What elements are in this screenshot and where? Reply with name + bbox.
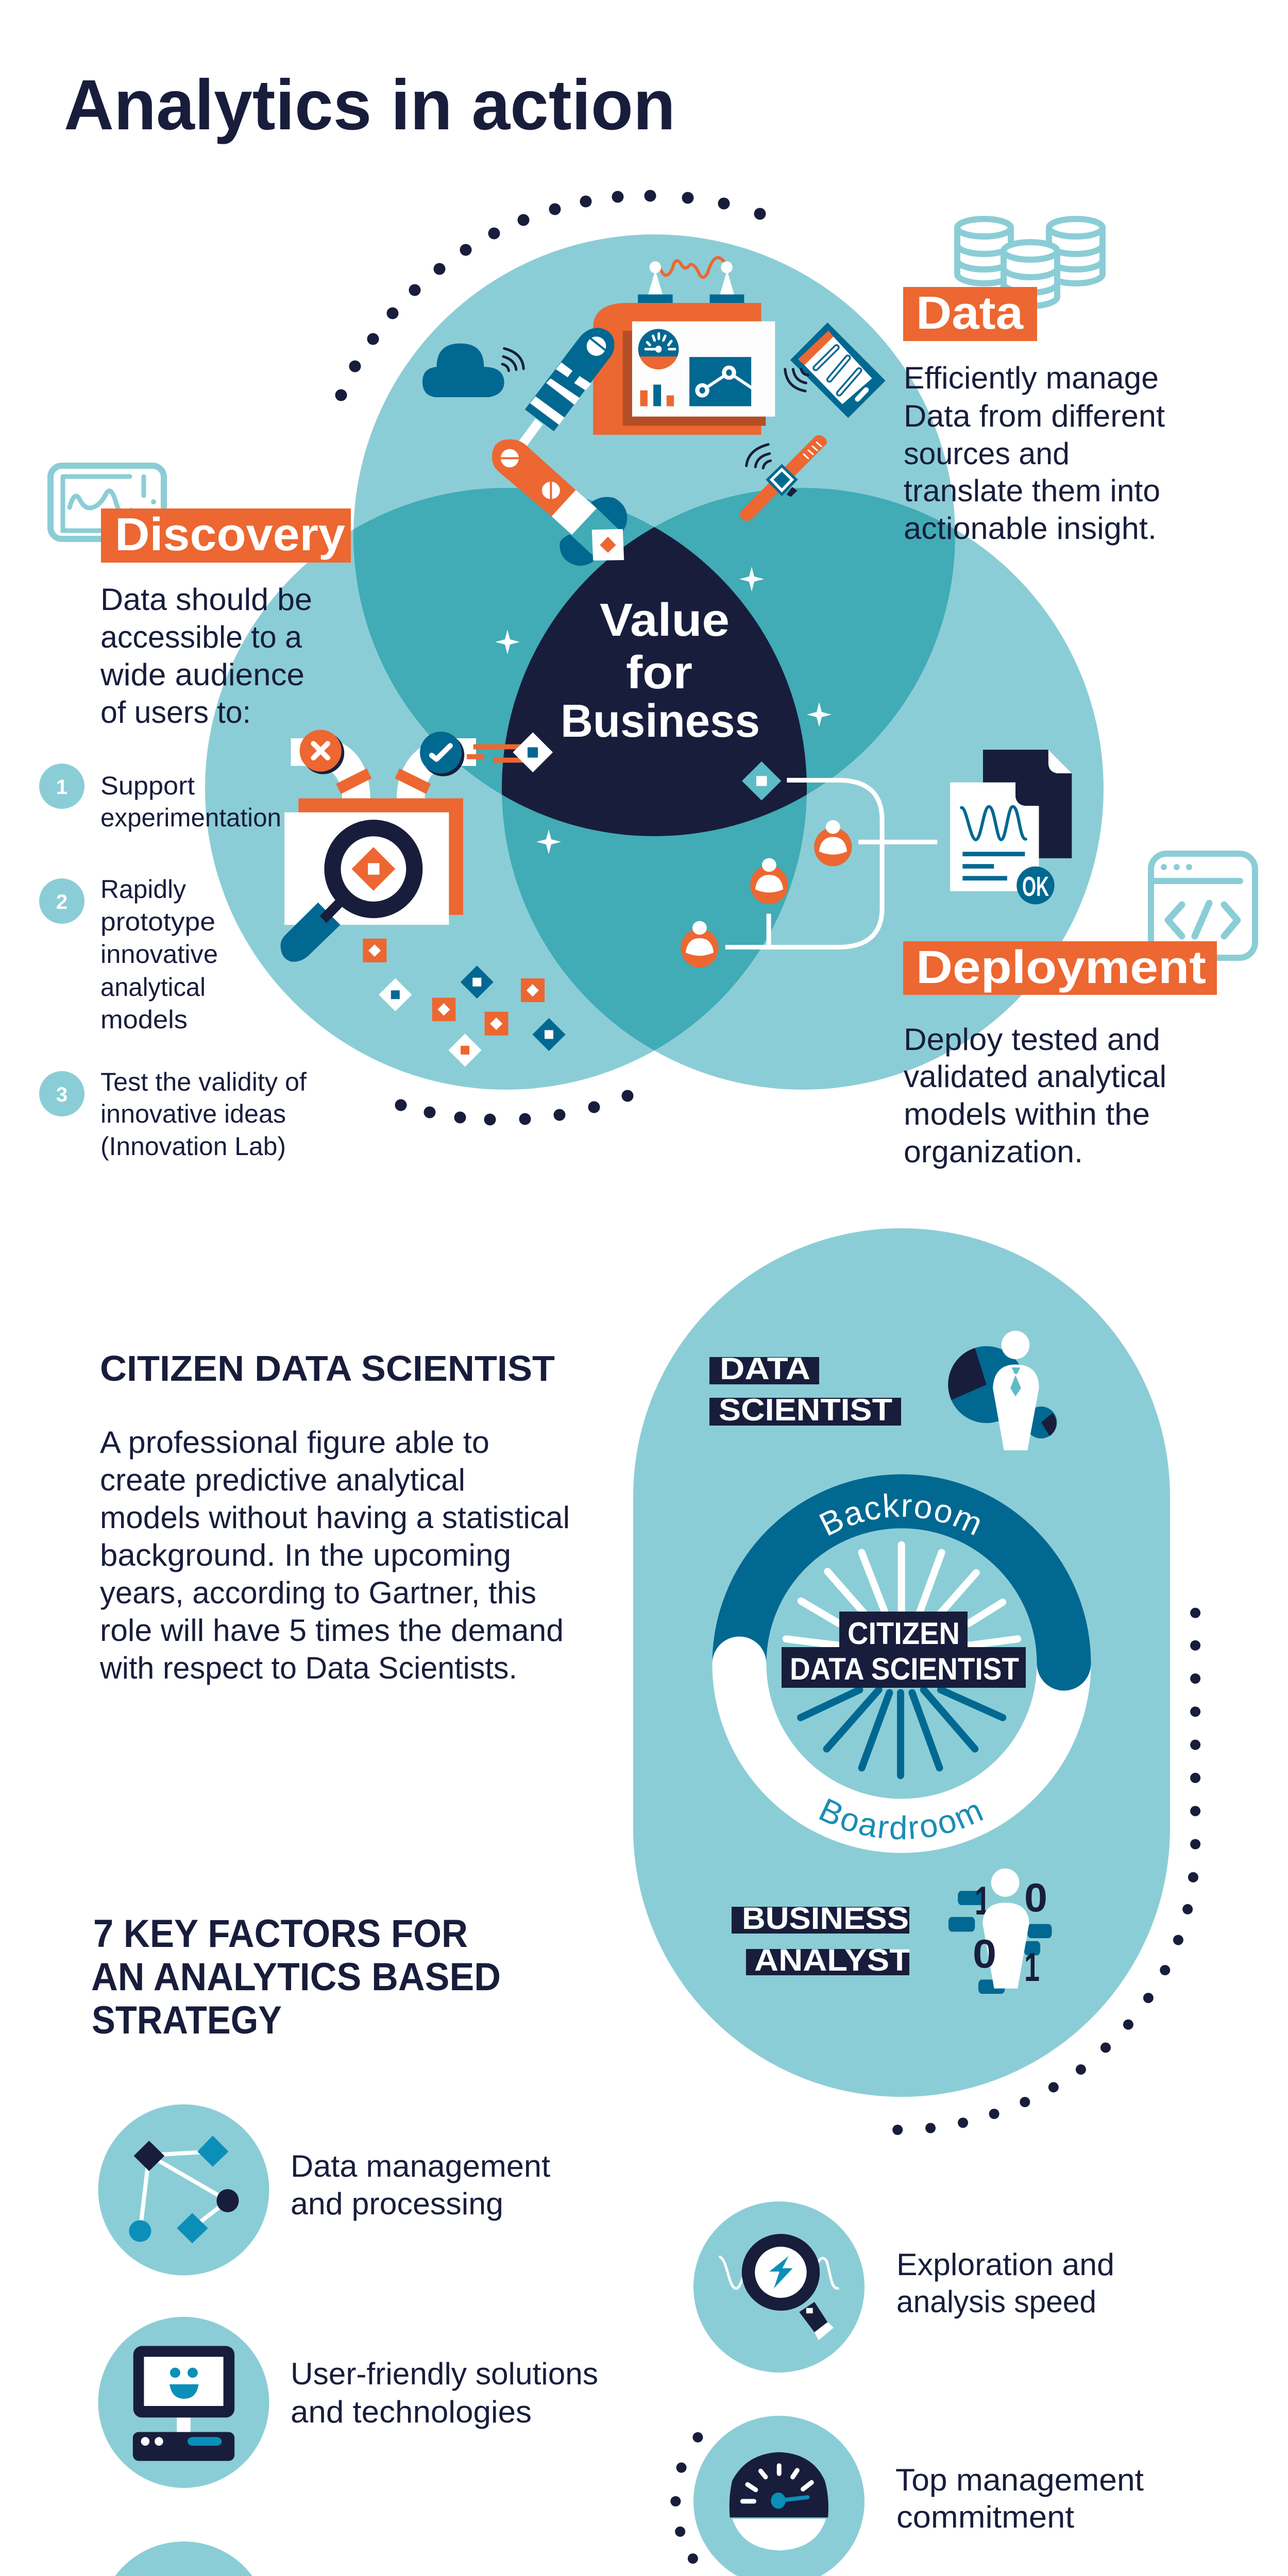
icon: top management gauge — [730, 2452, 828, 2550]
text block: data: sources and — [904, 436, 1070, 471]
text block: citizen data scientist: with respect to Data Scientists. — [99, 1651, 517, 1685]
factor circles: left column — [98, 2104, 269, 2576]
text block: citizen data scientist: models without having a statistical — [100, 1500, 570, 1535]
icon: user friendly computer — [133, 2346, 234, 2461]
heading: value for business: for — [626, 647, 692, 699]
text block: discovery intro: Data should be — [100, 582, 312, 617]
text block: deployment: Deploy tested and — [904, 1022, 1160, 1057]
heading: 7 key factors: AN ANALYTICS BASED — [91, 1955, 501, 1999]
label: discovery: Discovery — [115, 509, 345, 561]
list item 1 — [39, 764, 281, 832]
text block: data: Efficiently manage — [904, 361, 1159, 395]
text block: discovery intro: of users to: — [100, 695, 251, 730]
panel: citizen pill — [633, 1228, 1170, 2097]
list item 1: 1 — [56, 776, 67, 799]
label: citizen data scientist badge: DATA SCIENTIST — [790, 1652, 1019, 1686]
label: citizen data scientist badge: CITIZEN — [848, 1616, 960, 1651]
icon: data management network — [129, 2136, 239, 2243]
label: data scientist: DATA — [720, 1351, 810, 1386]
factor text: data management: Data management — [291, 2149, 550, 2183]
icon: code window — [1151, 854, 1255, 958]
list item 3: Test the validity of — [100, 1067, 307, 1096]
text block: data: translate them into — [904, 473, 1160, 508]
icon: discovery chart monitor — [50, 466, 164, 539]
factor text: exploration: Exploration and — [896, 2247, 1114, 2282]
dotted arc: bottom of venn — [401, 1096, 628, 1120]
list item 2: Rapidly — [100, 875, 186, 904]
heading: 7 key factors: 7 KEY FACTORS FOR — [93, 1912, 468, 1956]
list item 3 — [39, 1067, 307, 1161]
factor text: top management: commitment — [896, 2500, 1074, 2534]
label: data scientist — [709, 1351, 901, 1427]
factor text: exploration — [896, 2247, 1114, 2319]
rays: centre burst — [786, 1545, 1018, 1775]
text block: citizen data scientist: years, according to Gartner, this — [100, 1575, 536, 1610]
label: business analyst: BUSINESS — [742, 1901, 909, 1936]
heading: value for business: Value — [600, 595, 730, 646]
text block: discovery intro — [100, 582, 312, 730]
text block: citizen data scientist: background. In the upcoming — [100, 1538, 511, 1572]
icon: exploration magnifier — [720, 2234, 838, 2341]
heading: 7 key factors — [91, 1912, 501, 2042]
sparkle stars — [495, 567, 832, 854]
list item 2: innovative — [100, 940, 218, 969]
list item 1: Support — [100, 771, 195, 800]
icon: data centre dashboard with robot arm — [422, 258, 886, 566]
text block: data: actionable insight. — [904, 511, 1157, 546]
text block: deployment: organization. — [904, 1134, 1083, 1169]
text block: citizen data scientist: A professional figure able to — [100, 1425, 489, 1460]
icon: database coins — [957, 219, 1103, 306]
factor circles: right column — [693, 2201, 865, 2576]
text block: data — [904, 361, 1165, 546]
label: citizen data scientist badge — [782, 1612, 1026, 1688]
venn diagram — [205, 234, 1104, 1090]
chart: backroom boardroom ring — [712, 1475, 1091, 1853]
factor text: data management: and processing — [291, 2187, 503, 2221]
list item 2: prototype — [100, 907, 215, 936]
factor text: user friendly: and technologies — [291, 2395, 532, 2429]
factor text: top management: Top management — [895, 2463, 1144, 2497]
label: deployment: Deployment — [916, 942, 1206, 993]
label: business analyst — [732, 1901, 910, 1977]
factor text: user friendly — [291, 2357, 598, 2429]
icon: business analyst figure — [948, 1869, 1052, 1994]
label: data: Data — [916, 287, 1024, 339]
icon: data scientist figure — [948, 1331, 1057, 1450]
factor text: data management — [291, 2149, 550, 2221]
list item 2 — [39, 875, 218, 1034]
label: business analyst: ANALYST — [754, 1943, 910, 1977]
list item 1: experimentation — [100, 803, 281, 832]
text block: citizen data scientist — [99, 1425, 570, 1685]
text block: citizen data scientist: create predictive analytical — [100, 1463, 465, 1497]
dotted arc: around citizen pill — [897, 1613, 1195, 2130]
icon: discovery pipes and magnifier — [281, 730, 566, 1066]
text block: discovery intro: accessible to a — [100, 620, 302, 654]
icon: business analyst figure: 0 — [973, 1931, 996, 1976]
list item 2: analytical — [100, 973, 206, 1002]
factor text: user friendly: User-friendly solutions — [291, 2357, 598, 2391]
icon: deployment network and documents — [681, 750, 1072, 968]
chart: backroom boardroom ring: Backroom — [819, 1493, 980, 1536]
text block: deployment — [904, 1022, 1166, 1169]
list item 3: (Innovation Lab) — [100, 1132, 286, 1161]
dotted arc: top of venn — [341, 196, 760, 395]
list item 2: 2 — [56, 891, 67, 913]
heading: value for business: Business — [561, 696, 760, 747]
list item 3: 3 — [56, 1083, 67, 1106]
list item 2: models — [100, 1005, 188, 1034]
icon: business analyst figure: 1 — [1024, 1944, 1040, 1990]
dotted arc: top management — [675, 2437, 714, 2576]
list item 3: innovative ideas — [100, 1099, 286, 1128]
text block: deployment: validated analytical — [904, 1059, 1166, 1094]
heading: citizen data scientist: CITIZEN DATA SCIENTIST — [100, 1348, 555, 1388]
text block: data: Data from different — [904, 399, 1165, 433]
heading: 7 key factors: STRATEGY — [92, 1998, 282, 2042]
title: Analytics in action — [64, 65, 675, 145]
icon: business analyst figure: 1 — [975, 1878, 990, 1923]
text block: citizen data scientist: role will have 5 times the demand — [100, 1613, 564, 1648]
ok badge text: OK — [1022, 871, 1049, 902]
label: data scientist: SCIENTIST — [719, 1393, 892, 1427]
chart: backroom boardroom ring: Boardroom — [819, 1798, 983, 1839]
text block: discovery intro: wide audience — [100, 657, 304, 692]
factor text: top management — [895, 2463, 1144, 2534]
text block: deployment: models within the — [904, 1097, 1150, 1131]
factor text: exploration: analysis speed — [896, 2284, 1096, 2319]
icon: business analyst figure: 0 — [1024, 1875, 1047, 1920]
heading: value for business — [561, 595, 760, 747]
